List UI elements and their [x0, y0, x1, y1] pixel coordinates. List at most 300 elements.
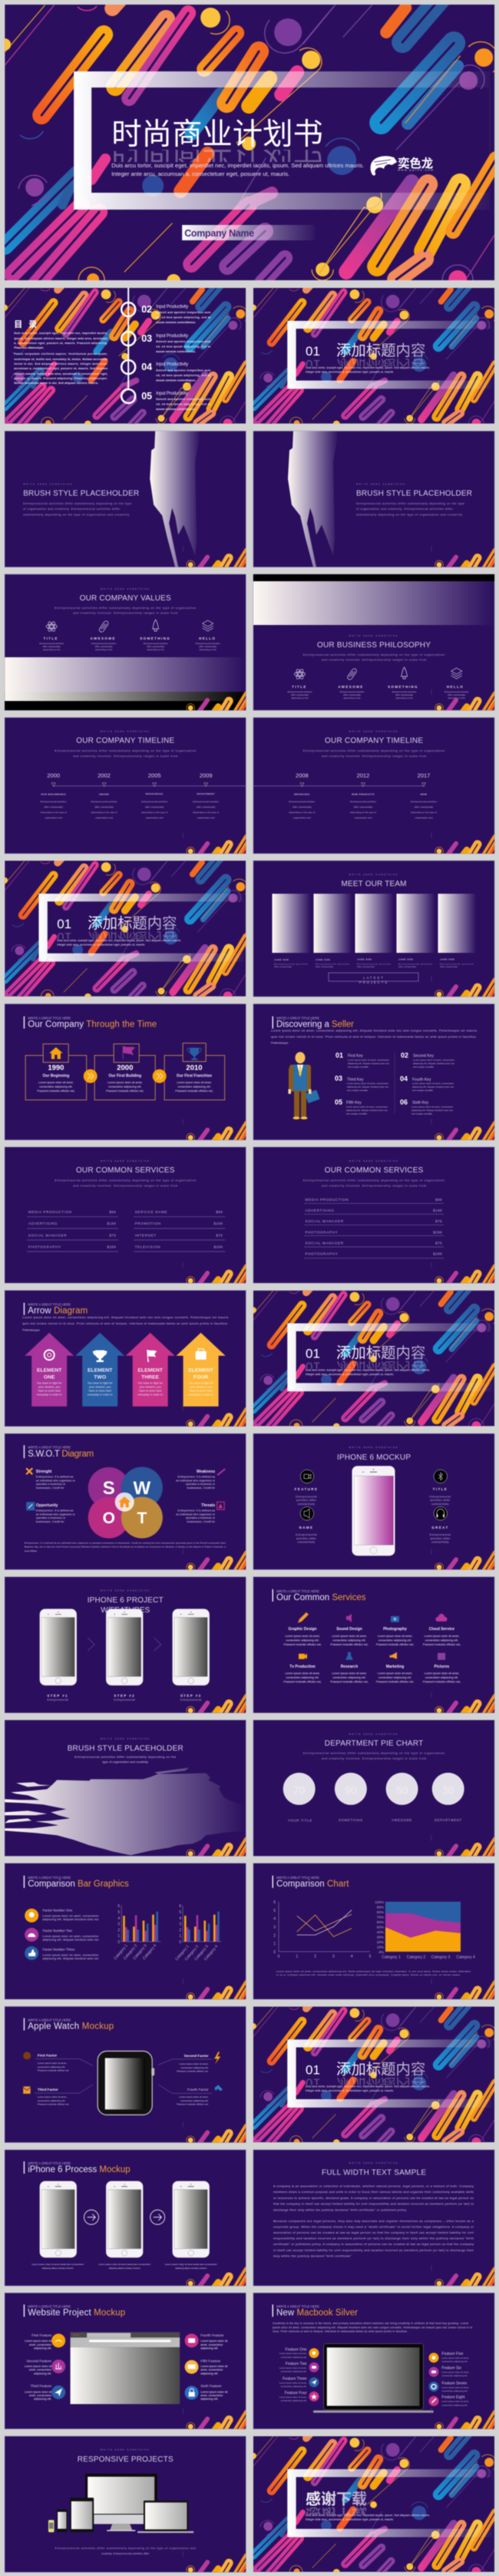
- card 2000: Lorem ipsum dolor sit amet,: [107, 1081, 143, 1084]
- factor three: adipiscing elit. Aliquam tincidunt ante nec: [42, 1957, 99, 1960]
- third factor: Lorem ipsum dolor sit amet,: [38, 2095, 67, 2098]
- stacked area chart: 10%: [377, 1945, 384, 1949]
- milestone text: Entrepreneurial activities: [193, 800, 220, 803]
- key numbers: 01: [335, 1052, 343, 1060]
- service text row two: Praesent molestie efficitur est,: [376, 1680, 414, 1683]
- price table: [304, 1198, 444, 1258]
- card 2000: consectetur adipiscing elit.: [108, 1086, 141, 1089]
- feature right bottom: substantially: [431, 1540, 449, 1543]
- heading: [317, 634, 431, 650]
- item 02: 02: [141, 304, 152, 315]
- heading: OUR COMPANY TIMELINE: [76, 737, 175, 746]
- heading: OUR COMMON SERVICES: [76, 1166, 175, 1175]
- bar chart one: 3: [117, 1922, 120, 1926]
- contents heading: 目录: [14, 319, 43, 329]
- captions: TITLE: [292, 685, 307, 689]
- contents intro text: Fusce vulputate eleifend sapien. Vestibulum purus quam,: [14, 352, 107, 355]
- milestone text: [41, 800, 220, 819]
- arrow one: have to work hard: [38, 1390, 61, 1393]
- fourth factor: [158, 2085, 223, 2105]
- heading: [322, 2161, 426, 2178]
- card 2010: Lorem ipsum dolor sit amet,: [177, 1081, 212, 1084]
- value icons: [46, 620, 213, 633]
- intro: ipsum dolor sit amet, consectetur adipiscing elit. Aliquam tincidunt ante nec sem congue convallis. Pellentesque vel mauris quis nisl ornare rutrum in id: [273, 2326, 472, 2329]
- stacked area chart: 0%: [378, 1950, 384, 1954]
- first factor: Praesent molestie efficitur est,: [38, 2068, 69, 2072]
- left price table: $299: [107, 1245, 116, 1248]
- line chart: 0: [278, 1954, 280, 1959]
- SWOT letters: S: [103, 1478, 115, 1499]
- bar chart two: 3: [179, 1922, 181, 1926]
- opportunity: [26, 1502, 76, 1523]
- threats: [176, 1502, 224, 1523]
- heading: WRITE A GREAT TITLE HERE: [276, 1017, 319, 1020]
- left price table: $99: [109, 1210, 116, 1214]
- section description: Integer ante arcu, accumsan a, consectetuer eget, posuere ut, mauris.: [57, 943, 145, 946]
- descriptions: depending on the: [291, 696, 309, 699]
- logo: www.ppt20.com: [398, 169, 433, 172]
- heading: WRITE HERE SOMETHING: [356, 482, 406, 485]
- key numbers: 03: [335, 1075, 342, 1083]
- card 1990: 1990: [48, 1064, 64, 1073]
- reflection: [306, 2077, 425, 2085]
- item 03: cd, ed mea ipsum adipiscing, sed at: [156, 346, 211, 349]
- threats: operates a business or: [186, 1516, 216, 1519]
- arrow four: [177, 1333, 226, 1407]
- arrow three: You have to fight for: [137, 1382, 164, 1385]
- left features: consectetur adipiscing elit.: [281, 2385, 307, 2388]
- contents intro text: accumsan a, consectetuer eget, posuere ut, mauris. Sed aliquam: [14, 367, 107, 370]
- item 02: cd, ed mea ipsum adipiscing, sed at: [156, 316, 211, 319]
- card 2010: consectetur adipiscing elit.: [177, 1086, 211, 1089]
- key text: sem congue convallis.: [348, 1066, 369, 1069]
- heading: WRITE HERE SOMETHING: [349, 1159, 398, 1162]
- weakness: businesses. Credit for: [187, 1486, 216, 1490]
- service text row two: Praesent molestie efficitur est,: [423, 1680, 461, 1683]
- paragraph: of organization and creativity. Entrepreneurial activities differ: [356, 508, 454, 511]
- heading: WRITE A GREAT TITLE HERE: [28, 2161, 71, 2165]
- slide: common services one table: [253, 1147, 499, 1287]
- right price table: $99: [216, 1210, 223, 1214]
- price table: $75: [435, 1219, 442, 1223]
- heading: Discovering a Seller: [276, 1020, 354, 1030]
- SWOT letters: [103, 1478, 151, 1527]
- milestone text: differ substantially: [292, 805, 312, 809]
- fifth feature: amet, consectetur: [200, 2368, 223, 2371]
- bar chart two: 0: [179, 1940, 181, 1945]
- value descriptions: differ substantially: [43, 645, 61, 648]
- step labels: [47, 1694, 202, 1701]
- intro: [55, 607, 196, 614]
- third factor: consectetur adipiscing elit.: [38, 2099, 65, 2102]
- factor one: Lorem ipsum dolor sit amet, consectetur: [42, 1914, 99, 1917]
- section description: [57, 939, 181, 946]
- right features: Feature Eight: [441, 2396, 465, 2400]
- heading: IPHONE 6 PROJECT: [88, 1596, 164, 1605]
- price table: $99: [435, 1198, 442, 1202]
- service captions row one: Sound Design: [336, 1627, 362, 1632]
- slide: iPhone 6 mockup: [253, 1433, 499, 1573]
- heading: [24, 2304, 125, 2317]
- price table: $299: [433, 1230, 442, 1234]
- intro: [271, 1029, 477, 1045]
- feature right top: [430, 1470, 451, 1506]
- intro: Entrepreneurial activities differ substantially depending on the type of organization: [55, 1179, 196, 1182]
- milestone labels: BRANCHES: [294, 793, 310, 796]
- sixth feature: Lorem ipsum dolor sit: [200, 2390, 227, 2393]
- right features: consectetur adipiscing elit.: [441, 2360, 468, 2363]
- footer text: Baptiste Say, but in fact the Irish-French economist Richard Cantillon defined it first in his Essai sur la Nature du Commerce en Général, or Essay on the Nature of Trade in General, a: [25, 1546, 226, 1549]
- line chart: 3: [332, 1954, 335, 1959]
- paragraph: substantially depending on the type of organization and creativity: [23, 513, 129, 516]
- subtitle text: Duis arcu tortor, suscipit eget, imperdiet nec, imperdiet iaculis, ipsum. Sed aliquam ultrices mauris.: [111, 162, 364, 169]
- heading: RESPONSIVE PROJECTS: [78, 2455, 173, 2464]
- line chart: 1: [273, 1942, 276, 1946]
- service text row one: [283, 1635, 461, 1646]
- milestone labels: OUR BEGINNINGS: [41, 793, 66, 796]
- years: 2017: [418, 772, 430, 779]
- service text row two: consectetur adipiscing elit.: [332, 1676, 366, 1679]
- card 1990: [25, 1044, 87, 1100]
- contents intro text: posuere ut, mauris. Praesent adipiscing. Phasellus ullamcorper.: [14, 377, 107, 380]
- service text row two: Lorem ipsum dolor sit amet,: [378, 1672, 412, 1675]
- key titles: Sixth Key: [412, 1101, 429, 1106]
- corner decoration: [183, 1549, 250, 1573]
- body paragraph two: Because companies are legal persons, they also may associate and register themselves as companies – often known as a: [273, 2219, 474, 2223]
- arrow 2: [153, 1070, 167, 1083]
- slide: macbook: [253, 2293, 499, 2432]
- service text row one: Praesent molestie efficitur est,: [423, 1643, 461, 1646]
- heading: [272, 2304, 358, 2317]
- bar chart two: Category 1: [174, 1944, 190, 1962]
- bar chart one: Category 4: [142, 1943, 157, 1961]
- heading: WRITE HERE SOMETHING: [101, 587, 150, 590]
- corner decoration: [431, 2408, 499, 2432]
- intro: Entrepreneurial activities differ substantially depending on the type of organization: [55, 607, 196, 610]
- brush image: [288, 432, 339, 567]
- slide: contents: [2, 283, 248, 428]
- years: [296, 772, 430, 779]
- reflection: [306, 1361, 425, 1370]
- corner decoration: [431, 833, 499, 858]
- card 1990: Praesent molestie efficitur est,: [37, 1090, 75, 1093]
- heading: WRITE A GREAT TITLE HERE: [28, 1446, 71, 1450]
- left features: Feature One: [286, 2347, 307, 2352]
- price table: SOCIAL MANAGER: [306, 1219, 344, 1223]
- slide: section 01 (d): [250, 2001, 496, 2147]
- sixth feature: adipiscing elit.: [200, 2397, 218, 2400]
- stacked area chart: 100%: [375, 1900, 384, 1904]
- intro: [22, 1315, 228, 1332]
- reflection: 感谢下载: [306, 2505, 367, 2522]
- key text: adipiscing elit. Aliquam tincidunt ante nec: [412, 1086, 454, 1089]
- left features: Lorem ipsum dolor sit amet,: [279, 2381, 307, 2384]
- section title: 添加标题内容: [336, 2061, 425, 2078]
- captions: [31, 2263, 217, 2270]
- section description: Integer ante arcu, accumsan a, consectetuer eget, posuere ut, mauris.: [306, 370, 394, 373]
- intro: [303, 749, 444, 758]
- arrow one: ONE: [44, 1375, 55, 1381]
- intro: and creativity involved. Entrepreneurship ranges in scale from: [73, 1184, 177, 1187]
- service text row two: consectetur adipiscing elit.: [425, 1676, 458, 1679]
- corner decoration: [183, 1119, 250, 1144]
- feature right top: Entrepreneurial: [430, 1496, 451, 1499]
- corner decoration: [183, 2551, 250, 2576]
- team descriptions: Entrepreneurial activities: [316, 963, 350, 966]
- right features: Lorem ipsum dolor sit amet,: [441, 2370, 469, 2373]
- strength: operates a business or: [36, 1483, 66, 1486]
- feature left top: FEATURE: [295, 1487, 318, 1491]
- first feature: adipiscing elit.: [34, 2346, 51, 2349]
- first feature: [25, 2333, 65, 2349]
- service captions row two: Pictures: [435, 1665, 449, 1669]
- body paragraph two: duty within the publicly declared "birth certificate": [273, 2254, 352, 2258]
- body paragraph two: in itself can accept limited liability for civil responsibility and taxation incurred as members perform (or fail) to discharge their: [273, 2248, 474, 2252]
- pie labels: AWESOME: [392, 1818, 412, 1822]
- arrow two: TWO: [94, 1375, 106, 1381]
- feature left top: Entrepreneurial: [296, 1496, 317, 1499]
- service text row one: Lorem ipsum dolor sit amet,: [378, 1635, 412, 1638]
- key text: Lorem ipsum dolor sit amet, consectetur: [412, 1082, 454, 1085]
- card 2000: [94, 1044, 155, 1100]
- macbook mockup: [313, 2343, 434, 2412]
- slide: common services two tables: [5, 1147, 250, 1287]
- service captions row one: [289, 1627, 454, 1632]
- step labels: Entrepreneurial: [180, 1698, 202, 1701]
- item 03: Dolenti and apenten temporibus aum: [156, 340, 210, 343]
- strength: an individual who organizes or: [36, 1479, 76, 1482]
- line chart: 0: [273, 1950, 276, 1955]
- arrow two: your dreams, you: [89, 1386, 111, 1389]
- section description: Integer ante arcu, accumsan a, consectetuer eget, posuere ut, mauris.: [306, 2518, 394, 2521]
- pie values: 90: [345, 1784, 357, 1796]
- reflection: 01: [57, 930, 71, 944]
- threats: Threats: [201, 1503, 215, 1508]
- pie placeholders: [283, 1773, 464, 1805]
- left price table: $75: [109, 1233, 116, 1238]
- title reflection: 时尚商业计划书: [111, 144, 323, 177]
- description: creativity. Entrepreneurial activities differ: [101, 2552, 150, 2555]
- reflection: [57, 931, 177, 940]
- factor two: adipiscing elit. Aliquam tincidunt ante nec: [42, 1938, 99, 1941]
- milestone text: differ substantially: [145, 805, 164, 809]
- team names: JANE DOE: [274, 958, 289, 961]
- heading: Our Common Services: [276, 1593, 366, 1602]
- line chart: 1: [296, 1954, 298, 1959]
- price table: $299: [433, 1252, 442, 1255]
- heading: WRITE HERE SOMETHING: [349, 634, 398, 637]
- left price table: MEDIA PRODUCTION: [28, 1210, 72, 1214]
- slide: timeline part 1: [5, 718, 250, 858]
- value descriptions: depending on the: [95, 648, 113, 651]
- key titles: Second Key: [413, 1054, 434, 1059]
- corner decoration: [183, 1979, 250, 2003]
- corner decoration: [431, 2265, 499, 2290]
- value captions: TITLE: [43, 637, 58, 640]
- feature left bottom: Entrepreneurial: [296, 1533, 317, 1536]
- slide: comparison bar graphics: [5, 1863, 250, 2003]
- slide: iPhone process: [5, 2150, 250, 2290]
- intro: and creativity involved. Entrepreneurship ranges in scale from: [73, 755, 177, 758]
- intro: Entrepreneurial activities differ substantially depending on the type of organization: [55, 749, 196, 752]
- corner decoration: [431, 1549, 499, 1573]
- heading: OUR COMPANY VALUES: [80, 594, 171, 603]
- arrow two: everyday in order to: [88, 1394, 112, 1397]
- bar chart one: Category 2: [123, 1943, 138, 1961]
- milestone text: depending on the type of: [350, 811, 376, 814]
- intro: and creativity involved. Entrepreneurship ranges in scale from: [322, 755, 426, 758]
- fourth feature: amet, consectetur: [200, 2343, 223, 2346]
- stacked area chart: Category 3: [431, 1955, 450, 1959]
- opportunity: an individual who organizes or: [36, 1513, 76, 1516]
- weakness: [176, 1469, 225, 1490]
- intro: [55, 749, 196, 758]
- bar chart one: 4: [117, 1916, 120, 1921]
- SWOT letters: O: [103, 1510, 115, 1527]
- weakness: an individual who organizes or: [176, 1479, 216, 1482]
- milestone text: differ substantially: [354, 805, 373, 809]
- section description: Integer ante arcu, accumsan a, consectetuer eget, posuere ut, mauris.: [306, 2089, 394, 2092]
- heading: DEPARTMENT PIE CHART: [325, 1739, 423, 1748]
- bar chart two: 5: [179, 1910, 181, 1915]
- image band: [253, 574, 494, 625]
- opportunity: Entrepreneur: It is defined as: [36, 1510, 74, 1513]
- philosophy icons: [295, 667, 462, 680]
- right features: Feature Seven: [441, 2381, 467, 2386]
- arrow one: [25, 1333, 74, 1407]
- captions: Lorem ipsum dolor sit amet ipeda dem consectetur: [31, 2263, 84, 2266]
- milestone text: Entrepreneurial activities: [141, 800, 168, 803]
- captions: adipsing aliara niveatry tincisnt: [175, 2267, 207, 2270]
- footer text: [276, 1969, 471, 1976]
- sixth feature: Sixth Feature: [200, 2384, 222, 2388]
- right features: Lorem ipsum dolor sit amet,: [441, 2386, 469, 2389]
- arrow three: [126, 1333, 175, 1407]
- milestone text: Entrepreneurial activities: [289, 800, 316, 803]
- bar chart two: 4: [179, 1916, 181, 1921]
- milestone text: differ substantially: [415, 805, 434, 809]
- weakness: operates a business or: [186, 1483, 216, 1486]
- left features: [279, 2347, 319, 2402]
- price table: $75: [435, 1241, 442, 1245]
- feature right bottom: [430, 1506, 451, 1543]
- opportunity: operates a business or: [36, 1516, 66, 1519]
- heading: [341, 873, 407, 888]
- descriptions: depending on the: [395, 696, 413, 699]
- descriptions: Entrepreneurial activities: [288, 690, 312, 693]
- arrow three: THREE: [141, 1375, 160, 1381]
- sixth feature: amet, consectetur: [200, 2394, 223, 2397]
- captions: Lorem ipsum dolor sit amet ipeda dem consectetur: [165, 2263, 217, 2266]
- heading: BRUSH STYLE PLACEHOLDER: [68, 1744, 183, 1753]
- price table: MEDIA PRODUCTION: [306, 1198, 349, 1202]
- footer text: book William: [25, 1549, 38, 1553]
- item 03: 03: [141, 333, 152, 344]
- captions: HELLO: [447, 685, 464, 689]
- heading: WRITE HERE SOMETHING: [101, 2448, 150, 2451]
- key text: adipiscing elit. Aliquam tincidunt ante nec: [346, 1109, 388, 1112]
- second feature: adipiscing elit.: [34, 2372, 51, 2375]
- strength: [26, 1468, 76, 1490]
- left price table: $199: [107, 1222, 116, 1225]
- right features: Feature Six: [441, 2366, 461, 2370]
- line chart: 5: [369, 1954, 372, 1959]
- right price table: INTERNET: [135, 1233, 157, 1238]
- heading: BRUSH STYLE PLACEHOLDER: [356, 490, 472, 498]
- heading: Comparison Bar Graphics: [28, 1880, 129, 1889]
- weakness: Weakness: [197, 1470, 215, 1474]
- key titles: [346, 1054, 434, 1106]
- corner decoration: [183, 2265, 250, 2290]
- arrow two: [75, 1333, 124, 1407]
- opportunity: Opportunity: [36, 1503, 58, 1508]
- arrow three: have to work hard: [139, 1390, 161, 1393]
- heading: W/FEATURES: [101, 1606, 150, 1615]
- team names: JANE DOE: [398, 958, 414, 961]
- paragraph: Entrepreneurial activities differ substantially depending on the type: [356, 502, 464, 505]
- item 05: [141, 391, 211, 411]
- right features: Lorem ipsum dolor sit amet,: [441, 2400, 469, 2403]
- footer text: in mi a, tristique maximus elit. Aenean vitae nulla vehicula, imperdiet arcu consequat, fringilla lacus. Donec ut mattis nisi, ut rutrum neque.: [276, 1973, 461, 1976]
- item 02: [141, 304, 211, 324]
- watch: [97, 2051, 154, 2115]
- corner decoration: [183, 833, 250, 858]
- slide: apple watch: [5, 2006, 250, 2146]
- key numbers: 05: [335, 1099, 342, 1106]
- third feature: [25, 2384, 65, 2400]
- reflection: 添加标题内容: [336, 1359, 425, 1376]
- fifth feature: Lorem ipsum dolor sit: [200, 2365, 227, 2368]
- body paragraph two: [273, 2219, 474, 2258]
- second factor: Second Factor: [184, 2054, 209, 2058]
- contents intro text: [14, 332, 107, 385]
- item 05: 05: [141, 391, 152, 402]
- pie labels: SOMETHING: [339, 1818, 363, 1822]
- slide: full width text: [253, 2150, 499, 2290]
- value captions: HELLO: [199, 637, 216, 640]
- centre icon: [115, 1493, 134, 1512]
- feature left top: activities differ: [296, 1499, 317, 1502]
- milestone text: organization and: [197, 816, 215, 819]
- right price table: $199: [213, 1222, 223, 1225]
- heading: [88, 1589, 164, 1615]
- section description: Duis arcu tortor, suscipit eget, imperdiet nec, imperdiet iaculis, ipsum. Sed aliquam ultrices mauris.: [306, 1369, 430, 1372]
- slide: business philosophy: [253, 574, 499, 714]
- corner decoration: [431, 1119, 499, 1144]
- intro: type of organization and creativity: [102, 1760, 148, 1764]
- value descriptions: Entrepreneurial activities: [144, 642, 168, 645]
- heading: WRITE HERE SOMETHING: [349, 1446, 398, 1449]
- service captions row two: Tv Production: [289, 1665, 316, 1669]
- reflection: 添加标题内容: [88, 929, 177, 946]
- service icons row two: [299, 1652, 445, 1660]
- milestone text: organization and: [146, 816, 164, 819]
- line chart: 4: [351, 1954, 353, 1959]
- stacked area chart: 50%: [377, 1925, 384, 1929]
- arrow three: everyday in order to: [137, 1394, 163, 1397]
- frame: [74, 71, 490, 210]
- threats: an individual who organizes or: [176, 1513, 216, 1516]
- description: Entrepreneurial activities differ substantially depending on the type of organization and: [55, 2547, 196, 2550]
- descriptions: differ substantially: [291, 693, 309, 696]
- third factor: Third Factor: [38, 2088, 58, 2092]
- descriptions: Entrepreneurial activities: [444, 690, 469, 693]
- item 05: Input Productivity: [156, 392, 188, 396]
- key text: Lorem ipsum dolor sit amet, consectetur: [413, 1059, 454, 1062]
- corner decoration: [183, 689, 250, 714]
- second factor: [158, 2052, 220, 2072]
- heading: WRITE HERE SOMETHING: [101, 1159, 150, 1162]
